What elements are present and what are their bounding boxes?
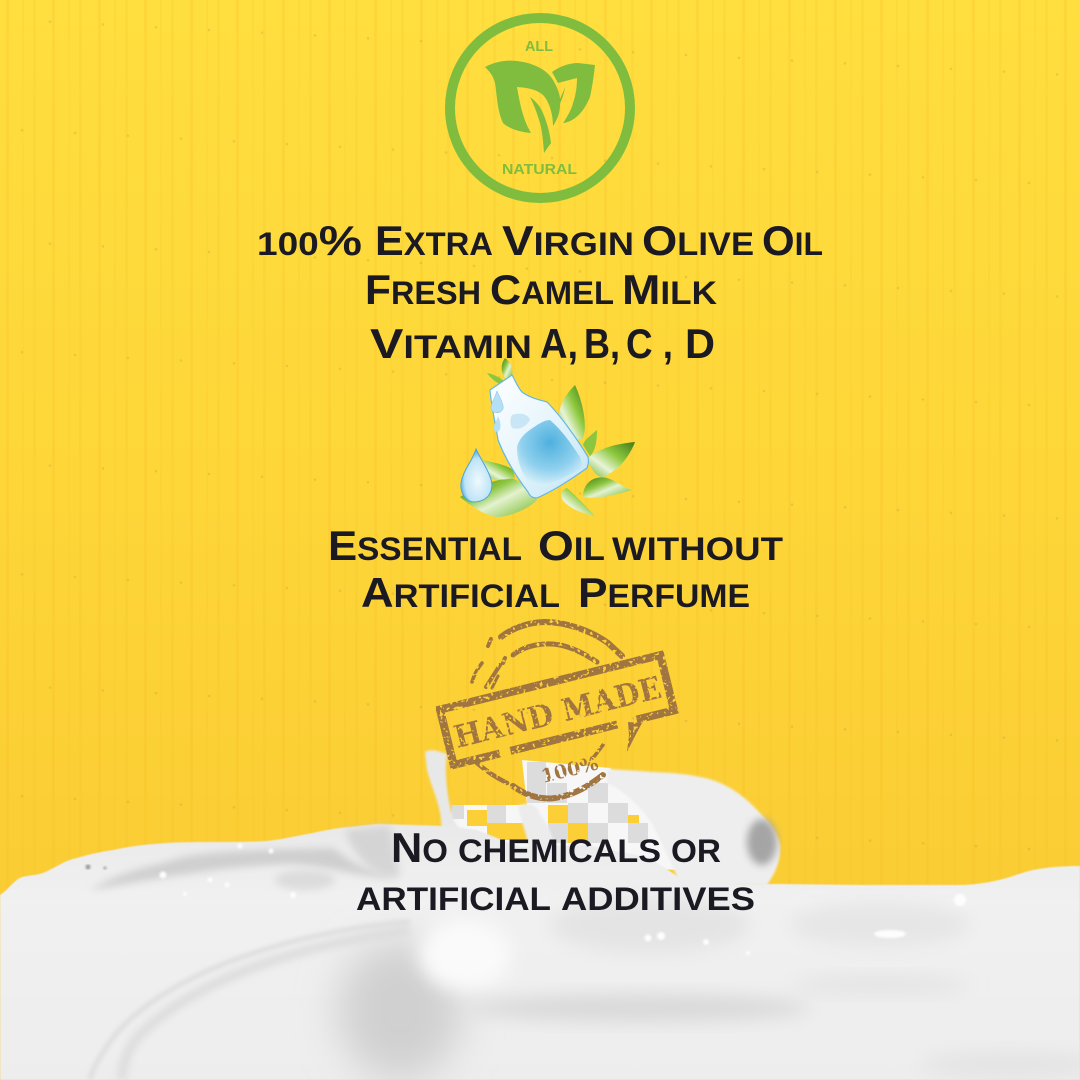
heading: ingredients: 100% [257,217,362,264]
logo word: natural: NATURAL [502,161,577,178]
icon bottle liquid [517,420,583,484]
heading: ingredients: MILK [622,266,717,313]
milk shading [90,819,1080,1080]
subheading: no chemicals: NO [391,824,448,871]
heading: ingredients: B, [584,320,620,367]
subheading: essential oil: ARTIFICIAL [361,569,560,616]
milk body [0,824,1080,1080]
stamp percent: 100% [539,752,600,788]
subheading: essential oil: ESSENTIAL [328,522,522,569]
heading: ingredients: EXTRA [375,217,493,264]
heading: ingredients [257,217,823,367]
milk splash and pool [0,750,1080,1080]
icon bottle handle [510,414,530,429]
subheading: essential oil: OIL [538,522,605,569]
milk droplets [160,844,966,955]
stamp tail [627,722,642,752]
heading: ingredients: FRESH [365,266,481,313]
logo leaves [485,61,595,153]
heading: ingredients: D [685,320,715,367]
subheading: no chemicals: OR [671,833,721,869]
milk splash: right hump [607,769,780,885]
icon leaves [460,358,635,517]
heading: ingredients: C , [626,320,673,367]
stamp arcs [472,622,622,798]
icon: oil bottle with leaves [460,358,635,517]
milk splash: centre blob [518,804,562,865]
heading: ingredients: OLIVE [642,217,754,264]
stamp text: HAND MADE [451,670,665,756]
subheading: essential oil: PERFUME [578,569,750,616]
logo: all natural badge [450,18,630,198]
heading: ingredients: VIRGIN [502,217,634,264]
heading: ingredients: CAMEL [490,266,614,313]
milk foam specks [86,864,106,870]
subheading: essential oil: WITHOUT [612,531,784,567]
milk ripple [90,922,410,1080]
milk splash: left column [425,750,468,838]
stamp frame [440,655,674,765]
subheading: no chemicals: ARTIFICIAL [356,881,551,917]
subheading: no chemicals [356,824,755,917]
heading: ingredients: OIL [762,217,823,264]
checkerboard transparency artefact [450,760,680,870]
stamp: hand made 100% [440,622,674,798]
subheading: essential oil [328,522,784,616]
subheading: no chemicals: ADDITIVES [561,881,755,917]
heading: ingredients: A, [540,320,578,367]
heading: ingredients: VITAMIN [370,320,532,367]
logo word: all: ALL [525,38,553,55]
icon bottle [490,375,588,498]
subheading: no chemicals: CHEMICALS [458,833,661,869]
icon drop [461,449,492,502]
icon bottle drips [491,391,503,413]
